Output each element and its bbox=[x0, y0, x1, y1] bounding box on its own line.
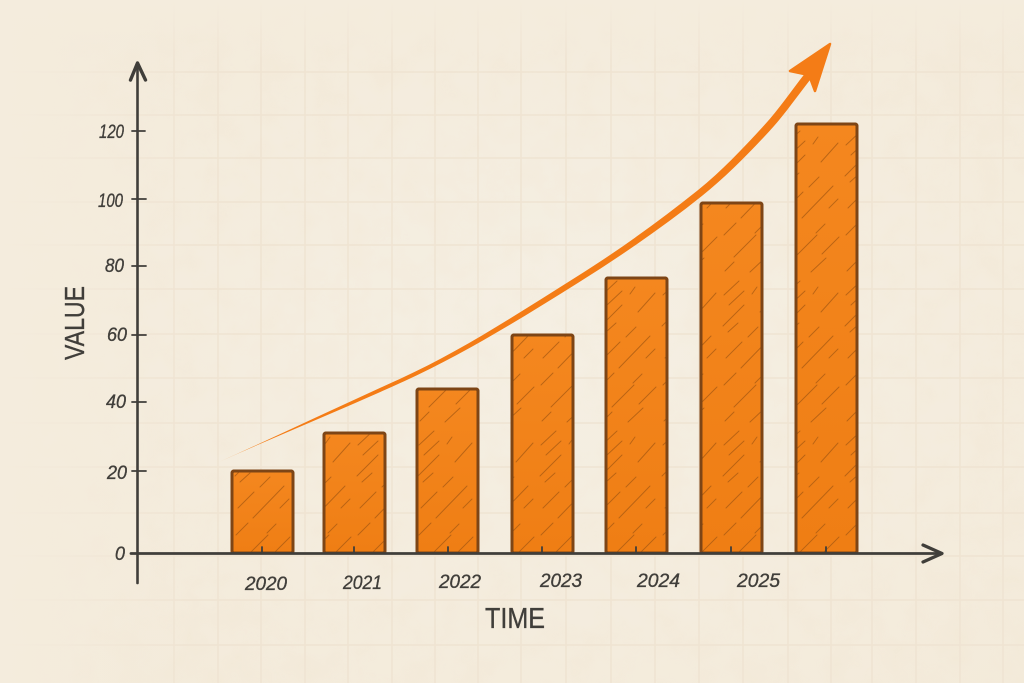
bar: 2024 bbox=[606, 278, 667, 553]
bars bbox=[232, 124, 857, 553]
bar: final unlabelled bbox=[796, 124, 857, 553]
x axis with arrowhead and ticks bbox=[131, 545, 942, 562]
y axis value labels: 80 bbox=[105, 256, 124, 277]
x axis year labels: 2020 bbox=[244, 574, 287, 595]
y axis value labels bbox=[98, 122, 127, 565]
x axis year labels: 2021 bbox=[342, 573, 382, 594]
y axis value labels: 60 bbox=[107, 325, 127, 346]
y axis title: VALUE bbox=[59, 286, 90, 360]
x axis year labels: 2022 bbox=[438, 572, 481, 593]
x axis year labels: 2023 bbox=[539, 571, 582, 592]
bar: 2025 bbox=[701, 203, 762, 553]
x axis year labels: 2025 bbox=[736, 571, 780, 592]
arrow: rising growth trend bbox=[219, 44, 830, 462]
y axis value labels: 20 bbox=[106, 463, 127, 484]
y axis value labels: 40 bbox=[106, 392, 126, 413]
bar: 2020 bbox=[232, 471, 293, 553]
bar: 2021 bbox=[324, 433, 385, 553]
bar: 2022 bbox=[417, 389, 478, 553]
bar: 2023 bbox=[512, 335, 573, 553]
x axis title: TIME bbox=[485, 603, 545, 635]
y axis value labels: 0 bbox=[115, 544, 125, 565]
y axis value labels: 120 bbox=[99, 122, 124, 143]
x axis year labels: 2024 bbox=[636, 571, 680, 592]
y axis with arrowhead and ticks bbox=[130, 63, 146, 583]
y axis value labels: 100 bbox=[98, 191, 123, 212]
x axis year labels bbox=[244, 571, 780, 595]
